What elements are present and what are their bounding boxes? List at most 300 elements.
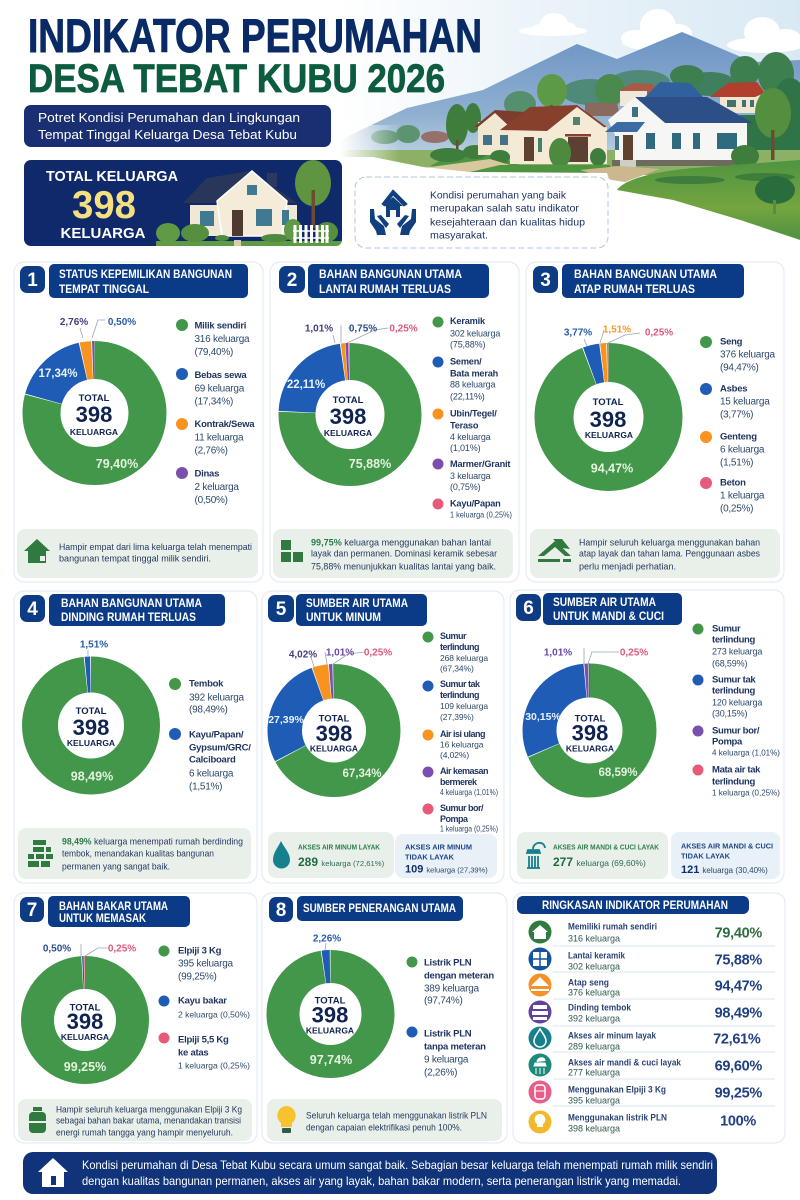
heading: UNTUK MANDI & CUCI xyxy=(553,611,664,623)
row: rumah sendiri xyxy=(528,920,762,944)
heading: SUMBER AIR UTAMA xyxy=(553,597,656,609)
insight box: perlu menjadi perhatian. xyxy=(579,562,676,572)
donut chart xyxy=(40,640,142,784)
legend: (97,74%) xyxy=(424,996,463,1006)
legend: Sumur tak xyxy=(712,674,756,686)
heading: BAHAN BANGUNAN UTAMA xyxy=(574,269,717,281)
legend: 69 keluarga xyxy=(194,384,245,394)
number badge 2 xyxy=(279,266,305,293)
callout: housing statement xyxy=(355,177,608,248)
number badge 8 xyxy=(269,897,293,922)
heading: DINDING RUMAH TERLUAS xyxy=(61,612,196,624)
heading: SUMBER PENERANGAN UTAMA xyxy=(303,903,456,915)
donut chart: 0,25% xyxy=(364,648,392,658)
insight box: Hampir seluruh keluarga menggunakan bahan xyxy=(579,538,760,548)
row: elpiji xyxy=(528,1080,762,1106)
number badge 2: 2 xyxy=(287,270,297,291)
legend: Ubin/Tegel/ xyxy=(450,408,497,418)
legend: Pompa xyxy=(712,736,743,748)
row: dinding tembok xyxy=(528,1000,762,1024)
legend: Sumur bor/ xyxy=(440,803,484,813)
heading: TEMPAT TINGGAL xyxy=(59,284,149,296)
heading xyxy=(296,594,427,626)
donut chart xyxy=(525,648,648,780)
insight box xyxy=(17,529,258,578)
heading xyxy=(49,264,248,298)
heading: UNTUK MINUM xyxy=(306,612,381,624)
akses mandi cuci tidak layak: 121 keluarga (30,40%) xyxy=(681,864,768,876)
number badge 7 xyxy=(20,897,44,922)
insight box xyxy=(267,1099,502,1141)
donut chart: 398 xyxy=(67,1009,103,1034)
legend: Asbes xyxy=(720,384,747,394)
legend: Tembok xyxy=(189,678,224,690)
legend xyxy=(692,624,780,798)
number badge 4: 4 xyxy=(27,599,38,620)
total keluarga card: 398 xyxy=(72,184,136,227)
legend: (94,47%) xyxy=(720,362,759,374)
legend: 2 keluarga xyxy=(194,482,239,493)
insight box: Seluruh keluarga telah menggunakan listrik PLN xyxy=(306,1110,487,1122)
row: listrik PLN: 398 keluarga xyxy=(568,1124,620,1134)
donut chart: 94,47% xyxy=(591,462,633,476)
panel 1: status kepemilikan xyxy=(14,262,263,582)
row: rumah sendiri: 316 keluarga xyxy=(568,934,620,944)
heading: SUMBER AIR UTAMA xyxy=(306,598,408,610)
heading: LANTAI RUMAH TERLUAS xyxy=(319,284,451,296)
callout: housing statement: Kondisi perumahan yang baik xyxy=(430,190,567,202)
heading: BAHAN BANGUNAN UTAMA xyxy=(61,598,202,610)
legend: dengan meteran xyxy=(424,970,494,982)
donut chart xyxy=(283,934,378,1067)
blue roof house xyxy=(615,122,747,160)
donut chart: 75,88% xyxy=(349,457,391,471)
row: rumah sendiri: Memiliki rumah sendiri xyxy=(568,922,657,932)
row: air minum: 72,61% xyxy=(713,1032,761,1048)
legend: (2,26%) xyxy=(424,1068,457,1078)
row: lantai keramik: Lantai keramik xyxy=(568,950,626,962)
legend: (79,40%) xyxy=(194,347,233,358)
subtitle banner xyxy=(24,105,331,147)
akses mandi cuci layak: AKSES AIR MANDI & CUCI LAYAK xyxy=(553,842,660,852)
heading: ATAP RUMAH TERLUAS xyxy=(574,284,695,296)
callout: housing statement: masyarakat. xyxy=(430,230,488,242)
row: listrik PLN xyxy=(528,1110,756,1134)
heading xyxy=(49,594,225,626)
legend: Semen/ xyxy=(450,356,482,366)
donut chart: 30,15% xyxy=(525,711,561,723)
legend: Seng xyxy=(720,336,743,348)
row: atap seng: 94,47% xyxy=(715,978,762,994)
heading xyxy=(543,593,682,625)
legend: terlindung xyxy=(712,634,755,646)
row: lantai keramik: 75,88% xyxy=(715,952,762,968)
legend: 6 keluarga xyxy=(720,444,765,456)
legend: 395 keluarga xyxy=(178,958,234,970)
legend: terlindung xyxy=(440,642,479,652)
legend: Mata air tak xyxy=(712,764,761,776)
insight box: layak dan permanen. Dominasi keramik sebesar xyxy=(311,548,497,560)
legend: 4 keluarga xyxy=(450,432,491,442)
akses air minum layak xyxy=(268,832,394,878)
legend: (0,25%) xyxy=(720,504,753,514)
legend: 1 keluarga (0,25%) xyxy=(178,1060,250,1070)
legend: 16 keluarga xyxy=(440,740,484,750)
legend: Kayu bakar xyxy=(178,996,227,1006)
legend: 4 keluarga (1,01%) xyxy=(440,787,498,797)
total keluarga card xyxy=(24,160,342,246)
akses mandi cuci layak: 277 keluarga (69,60%) xyxy=(553,855,646,869)
legend: 1 keluarga (0,25%) xyxy=(440,824,498,834)
legend: 376 keluarga xyxy=(720,350,776,360)
legend: Bebas sewa xyxy=(194,370,247,381)
footer conclusion banner xyxy=(23,1152,717,1194)
row: air mandi cuci xyxy=(528,1054,762,1078)
legend: Teraso xyxy=(450,420,479,430)
donut chart: KELUARGA xyxy=(70,427,118,437)
akses air minum tidak layak: 109 keluarga (27,39%) xyxy=(405,864,488,876)
heading: STATUS KEPEMILIKAN BANGUNAN xyxy=(59,269,232,281)
donut chart: 0,25% xyxy=(389,324,418,334)
row: listrik PLN: 100% xyxy=(720,1114,756,1130)
row: air minum xyxy=(528,1026,761,1052)
panel 8: penerangan xyxy=(262,893,507,1143)
total keluarga card: KELUARGA xyxy=(60,225,146,242)
legend: terlindung xyxy=(712,686,755,696)
legend: (68,59%) xyxy=(712,658,747,668)
heading xyxy=(308,264,489,298)
number badge 5: 5 xyxy=(276,599,287,620)
donut chart: 2,26% xyxy=(313,934,341,944)
panel 4: bahan dinding xyxy=(14,591,257,883)
legend: (67,34%) xyxy=(440,664,474,674)
number badge 6 xyxy=(516,594,541,621)
panel 7: bahan bakar xyxy=(14,893,257,1143)
number badge 1: 1 xyxy=(27,270,38,291)
legend: (4,02%) xyxy=(440,750,469,760)
legend: (75,88%) xyxy=(450,340,485,350)
insight box: 98,49% keluarga menempati rumah berdinding xyxy=(62,836,243,848)
legend: Listrik PLN xyxy=(424,1028,472,1040)
legend xyxy=(432,316,512,520)
legend: ke atas xyxy=(178,1048,208,1058)
akses mandi cuci tidak layak: AKSES AIR MANDI & CUCI xyxy=(681,842,773,850)
donut chart xyxy=(554,324,673,476)
donut chart: 398 xyxy=(590,407,626,432)
icon: bricks xyxy=(28,840,53,867)
donut chart: KELUARGA xyxy=(306,1026,354,1036)
donut chart: TOTAL xyxy=(593,397,624,408)
legend: terlindung xyxy=(712,776,755,788)
legend: 6 keluarga xyxy=(189,768,234,780)
legend: Pompa xyxy=(440,814,469,824)
insight box: sebagai bahan bakar utama, menandakan transisi xyxy=(56,1116,241,1126)
legend: tanpa meteran xyxy=(424,1042,486,1052)
legend: Marmer/Granit xyxy=(450,459,510,469)
donut chart: 1,51% xyxy=(80,640,108,650)
donut chart: 3,77% xyxy=(564,328,592,338)
donut chart: 0,25% xyxy=(108,944,136,954)
legend xyxy=(158,946,250,1070)
legend: Sumur xyxy=(712,624,741,634)
donut chart: 0,50% xyxy=(43,944,71,954)
legend: 392 keluarga xyxy=(189,692,245,704)
akses mandi cuci layak xyxy=(517,832,668,879)
donut chart: KELUARGA xyxy=(324,428,372,438)
row: rumah sendiri: 79,40% xyxy=(715,926,762,942)
donut chart: 398 xyxy=(312,1002,348,1028)
title: DESA TEBAT KUBU 2026 xyxy=(28,57,445,101)
donut chart: 1,01% xyxy=(326,648,354,658)
legend: Elpiji 3 Kg xyxy=(178,946,222,956)
insight box: atap layak dan tahan lama. Penggunaan asbes xyxy=(579,548,760,560)
donut chart: 68,59% xyxy=(598,767,638,779)
legend: 316 keluarga xyxy=(194,334,250,345)
legend: Sumur bor/ xyxy=(712,726,760,736)
akses air minum tidak layak: TIDAK LAYAK xyxy=(405,852,455,862)
legend: Sumur xyxy=(440,631,467,641)
heading: RINGKASAN INDIKATOR PERUMAHAN xyxy=(542,900,728,912)
insight box xyxy=(530,529,780,578)
total keluarga card: TOTAL KELUARGA xyxy=(46,168,178,185)
legend: Dinas xyxy=(194,468,219,480)
row: elpiji: 395 keluarga xyxy=(568,1096,620,1106)
insight box xyxy=(18,828,251,879)
legend: 389 keluarga xyxy=(424,984,480,994)
callout: housing statement: merupakan salah satu indikator xyxy=(430,202,580,214)
legend: Elpiji 5,5 Kg xyxy=(178,1034,229,1046)
donut chart: 97,74% xyxy=(310,1053,352,1067)
number badge 7: 7 xyxy=(27,900,37,921)
distant trees xyxy=(371,125,449,144)
number badge 4 xyxy=(20,595,45,622)
row: air mandi cuci: 69,60% xyxy=(715,1058,762,1074)
donut chart: 2,76% xyxy=(60,317,88,328)
donut chart: KELUARGA xyxy=(67,738,115,748)
callout: housing statement: kesejahteraan dan kualitas hidup xyxy=(430,216,585,228)
donut chart: KELUARGA xyxy=(61,1032,109,1042)
legend: 1 keluarga (0,25%) xyxy=(712,788,780,798)
icon: house xyxy=(38,1158,68,1187)
legend: (0,75%) xyxy=(450,482,481,492)
legend: Keramik xyxy=(450,316,486,326)
row: air minum: 289 keluarga xyxy=(568,1042,620,1052)
insight box: bangunan tempat tinggal milik sendiri. xyxy=(59,554,211,564)
icon: light bulb xyxy=(277,1106,296,1133)
legend: 3 keluarga xyxy=(450,471,491,481)
row: listrik PLN: Menggunakan listrik PLN xyxy=(568,1112,667,1124)
donut chart xyxy=(287,324,418,471)
heading xyxy=(562,264,744,298)
donut chart: TOTAL xyxy=(319,714,350,724)
number badge 8: 8 xyxy=(276,900,286,921)
number badge 1 xyxy=(20,266,45,293)
donut chart: TOTAL xyxy=(70,1002,101,1014)
insight box: permanen yang sangat baik. xyxy=(62,862,170,872)
legend xyxy=(422,631,498,834)
legend: Kayu/Papan/ xyxy=(189,730,244,740)
row: lantai keramik xyxy=(528,948,762,972)
row: dinding tembok: 98,49% xyxy=(715,1006,762,1022)
row: elpiji: Menggunakan Elpiji 3 Kg xyxy=(568,1084,666,1096)
donut chart: KELUARGA xyxy=(310,744,358,754)
legend: bermerek xyxy=(440,777,478,787)
akses air minum tidak layak xyxy=(395,834,497,878)
panel 6: air mandi cuci xyxy=(510,590,784,883)
donut chart: 99,25% xyxy=(64,1060,106,1074)
donut chart: 0,50% xyxy=(108,317,136,328)
donut chart: 0,25% xyxy=(645,328,673,338)
insight box: Hampir empat dari lima keluarga telah menempati xyxy=(59,542,252,553)
legend xyxy=(176,319,255,506)
donut chart: TOTAL xyxy=(315,996,346,1006)
icon: water drop xyxy=(273,841,290,868)
insight box xyxy=(18,1099,252,1141)
row: lantai keramik: 302 keluarga xyxy=(568,962,620,972)
legend xyxy=(700,336,776,514)
row: atap seng xyxy=(528,974,762,998)
akses air minum layak: 289 keluarga (72,61%) xyxy=(298,855,385,869)
legend: Listrik PLN xyxy=(424,958,472,968)
icon: roof xyxy=(538,539,571,562)
row: air minum: Akses air minum layak xyxy=(568,1030,657,1042)
insight box: 99,75% keluarga menggunakan bahan lantai xyxy=(311,538,491,548)
legend: (98,49%) xyxy=(189,704,228,716)
number badge 6: 6 xyxy=(523,598,534,619)
insight box: Hampir seluruh keluarga menggunakan Elpiji 3 Kg xyxy=(56,1104,242,1116)
legend: 120 keluarga xyxy=(712,698,762,708)
legend: Bata merah xyxy=(450,368,499,378)
legend: Gypsum/GRC/ xyxy=(189,742,251,754)
panel 2: bahan lantai xyxy=(270,262,519,582)
legend: (99,25%) xyxy=(178,972,217,982)
akses mandi cuci tidak layak xyxy=(671,832,780,879)
insight box: tembok, menandakan kualitas bangunan xyxy=(62,848,214,860)
donut chart: 398 xyxy=(73,715,109,740)
donut chart: 1,01% xyxy=(544,648,572,658)
panel 5: air minum xyxy=(262,591,504,883)
row: dinding tembok: 392 keluarga xyxy=(568,1014,620,1024)
legend: (22,11%) xyxy=(450,392,485,402)
donut chart: 1,51% xyxy=(603,324,631,336)
donut chart: 0,75% xyxy=(349,324,377,334)
donut chart: 27,39% xyxy=(268,714,304,726)
number badge 3: 3 xyxy=(540,270,551,291)
legend: 9 keluarga xyxy=(424,1054,469,1066)
heading: UNTUK MEMASAK xyxy=(59,913,147,925)
legend: (17,34%) xyxy=(194,396,233,408)
akses air minum tidak layak: AKSES AIR MINUM xyxy=(405,842,472,852)
legend xyxy=(169,678,251,792)
insight box: energi rumah tangga yang hampir menyeluruh. xyxy=(56,1128,233,1138)
subtitle banner: Potret Kondisi Perumahan dan Lingkungan xyxy=(38,110,300,125)
donut chart: TOTAL xyxy=(76,706,107,717)
row: air mandi cuci: Akses air mandi & cuci layak xyxy=(568,1058,682,1068)
legend: (1,01%) xyxy=(450,443,481,453)
legend: 109 keluarga xyxy=(440,701,488,711)
donut chart xyxy=(38,317,148,471)
legend: 302 keluarga xyxy=(450,328,500,338)
icon: house illustration xyxy=(156,160,342,246)
legend: (0,50%) xyxy=(194,495,228,506)
icon: house xyxy=(24,539,50,563)
heading xyxy=(297,896,463,921)
insight box: 75,88% menunjukkan kualitas lantai yang baik. xyxy=(311,562,496,572)
donut chart: 398 xyxy=(572,720,608,746)
akses air minum layak: AKSES AIR MINUM LAYAK xyxy=(298,842,380,852)
legend: 273 keluarga xyxy=(712,646,762,656)
legend: Milik sendiri xyxy=(194,320,246,332)
heading: BAHAN BAKAR UTAMA xyxy=(59,901,168,913)
panel 3: bahan atap xyxy=(526,262,784,582)
heading: BAHAN BANGUNAN UTAMA xyxy=(319,269,462,281)
donut chart xyxy=(38,944,136,1074)
row: air mandi cuci: 277 keluarga xyxy=(568,1068,620,1078)
legend: 1 keluarga xyxy=(720,490,765,502)
row: elpiji: 99,25% xyxy=(715,1086,762,1102)
legend: 2 keluarga (0,50%) xyxy=(178,1010,250,1020)
donut chart: TOTAL xyxy=(79,393,110,404)
footer conclusion banner: Kondisi perumahan di Desa Tebat Kubu secara umum sangat baik. Sebagian besar keluarga telah menempati rumah milik sendiri xyxy=(82,1158,713,1172)
legend: Kontrak/Sewa xyxy=(194,419,255,430)
insight box xyxy=(273,529,513,578)
donut chart: 17,34% xyxy=(38,368,78,380)
title: INDIKATOR PERUMAHAN xyxy=(28,9,482,62)
legend: 88 keluarga xyxy=(450,380,496,390)
donut chart: 79,40% xyxy=(96,457,138,471)
legend: Air kemasan xyxy=(440,766,488,776)
panel 9: ringkasan indikator xyxy=(513,893,785,1143)
donut chart: 398 xyxy=(76,402,112,427)
legend: Calciboard xyxy=(189,754,236,766)
donut chart: 0,25% xyxy=(620,648,648,658)
row: atap seng: Atap seng xyxy=(568,978,609,988)
legend: Air isi ulang xyxy=(440,729,485,739)
donut chart xyxy=(268,648,392,780)
donut chart: KELUARGA xyxy=(566,744,614,754)
donut chart: 398 xyxy=(330,404,366,429)
donut chart: TOTAL xyxy=(575,714,606,724)
donut chart: 67,34% xyxy=(342,768,382,780)
legend: Sumur tak xyxy=(440,679,481,689)
legend: (3,77%) xyxy=(720,410,753,420)
insight box: dengan capaian elektrifikasi penuh 100%. xyxy=(306,1122,462,1134)
title xyxy=(28,9,482,101)
icon: hands holding house xyxy=(370,190,416,235)
donut chart: TOTAL xyxy=(333,395,364,406)
donut chart: 4,02% xyxy=(289,650,317,660)
icon: floor tiles xyxy=(281,540,303,562)
donut chart: 98,49% xyxy=(71,770,113,784)
legend: 268 keluarga xyxy=(440,653,488,663)
legend: 15 keluarga xyxy=(720,396,770,408)
legend: 1 keluarga (0,25%) xyxy=(450,510,512,520)
row: atap seng: 376 keluarga xyxy=(568,988,620,998)
legend: (2,76%) xyxy=(194,446,228,456)
legend: Beton xyxy=(720,478,746,488)
legend: 4 keluarga (1,01%) xyxy=(712,748,780,758)
heading xyxy=(517,896,749,914)
donut chart: 1,01% xyxy=(305,324,333,334)
donut chart: 22,11% xyxy=(287,379,325,391)
legend: (27,39%) xyxy=(440,712,474,722)
footer conclusion banner: dengan kualitas bangunan permanen, akses air yang layak, bahan bakar modern, serta penerangan listrik yang memadai. xyxy=(82,1174,681,1188)
donut chart: 398 xyxy=(316,721,352,746)
legend: (30,15%) xyxy=(712,708,747,718)
akses mandi cuci tidak layak: TIDAK LAYAK xyxy=(681,852,731,860)
number badge 5 xyxy=(268,595,294,622)
legend: 11 keluarga xyxy=(194,432,244,444)
